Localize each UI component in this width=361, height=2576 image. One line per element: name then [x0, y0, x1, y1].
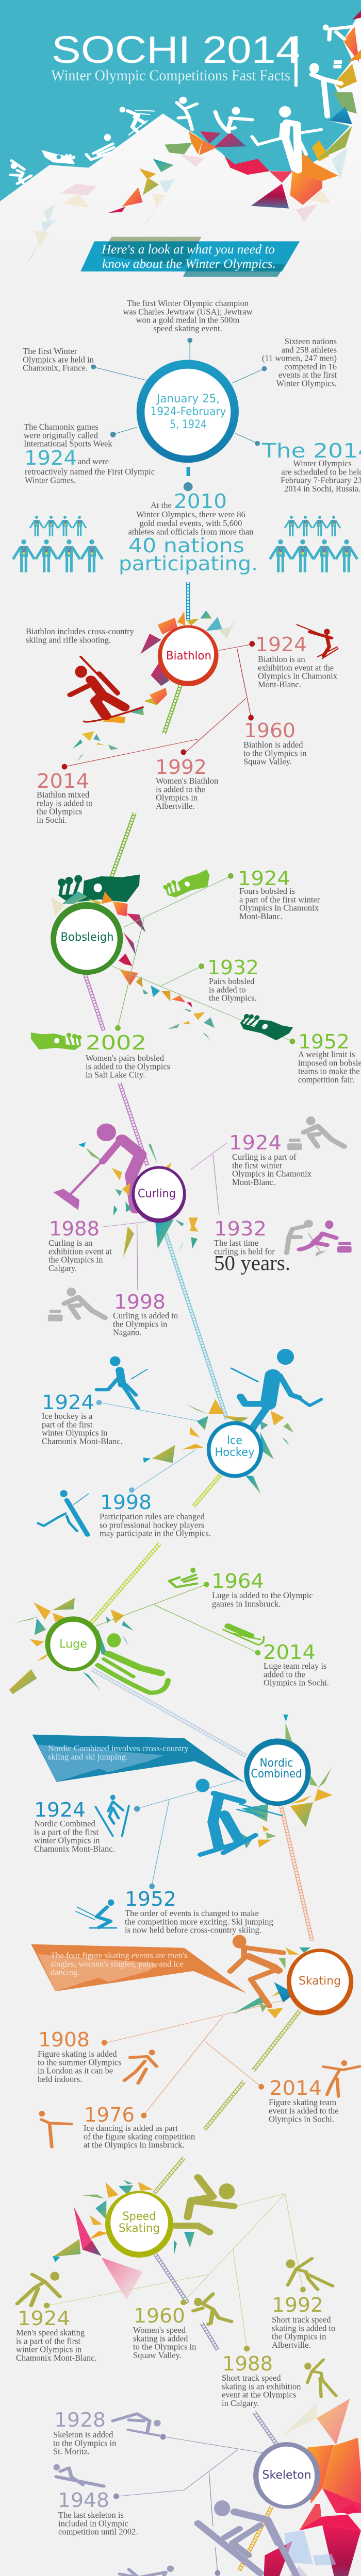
milestone 1924: 1924: [42, 1391, 94, 1414]
milestone 1932: 1932: [214, 1217, 267, 1240]
date badge: 5, 1924: [170, 418, 207, 431]
badge: bobsleigh: Bobsleigh: [61, 931, 113, 944]
milestone 1998: so professional hockey players: [100, 1520, 204, 1530]
milestone 1960: [243, 719, 306, 767]
icon: small hockey player top: [96, 1357, 147, 1408]
milestone 2014: [37, 770, 93, 825]
milestone 1924: is a part of the first: [16, 2336, 81, 2346]
icon: large skier: [195, 1778, 282, 1855]
icons: small nordic figures: [76, 1794, 129, 1928]
milestone 2002: is added to the Olympics: [86, 1061, 170, 1071]
fact: Chamonix games: Winter Games.: [25, 475, 76, 485]
milestone 1924: is a part of the first: [34, 1827, 99, 1837]
panel: curling: [48, 1116, 352, 1337]
connector lines: [113, 2434, 262, 2576]
milestone 2014: Olympics in Sochi.: [269, 2114, 334, 2124]
milestone 2014: 2014: [263, 1641, 316, 1664]
milestone 1960: Squaw Valley.: [243, 757, 292, 767]
milestone 1960: Squaw Valley.: [133, 2350, 182, 2360]
badge: speed skating: Skating: [119, 2222, 160, 2235]
milestone 1924: Olympics in Chamonix: [258, 671, 338, 681]
milestone 1924: Chamonix Mont-Blanc.: [16, 2353, 97, 2363]
icons: small curlers: [48, 1116, 352, 1321]
fact: Chamonix: Chamonix, France.: [23, 363, 88, 373]
intro text: skiing and rifle shooting.: [26, 635, 111, 645]
callout wedge: [31, 1944, 247, 1993]
milestone 1952: the competition more exciting. Ski jumping: [125, 1917, 273, 1926]
milestone 1948: competition until 2002.: [58, 2527, 138, 2537]
geometric star: [230, 2399, 361, 2576]
date badge: January 25,: [156, 393, 220, 405]
milestone 1924: Olympics in Chamonix: [232, 1169, 312, 1179]
fact: 2010 games: 2010: [174, 490, 227, 513]
geometric shards: [9, 1598, 134, 1694]
milestone 1924: [229, 1131, 312, 1187]
milestone 1960: Women's speed: [133, 2325, 186, 2335]
milestone 1976: of the figure skating competition: [84, 2131, 195, 2141]
fact: Chamonix games: International Sports Week: [24, 439, 112, 449]
date badge: 1924-February: [151, 405, 226, 418]
fact: the 2014 games: 2014 in Sochi, Russia.: [284, 484, 360, 494]
milestone 2014: Luge team relay is: [264, 1661, 326, 1671]
fact: Chamonix: The first Winter: [23, 346, 77, 356]
icon: large skeleton athlete: [198, 2500, 302, 2576]
panel: skeleton: [53, 2399, 361, 2576]
milestone 2014: event is added to the: [269, 2106, 339, 2115]
milestone 1964: 1964: [211, 1570, 264, 1592]
fact: sixteen nations: Winter Olympics.: [276, 378, 337, 388]
badge: speed skating: [105, 2191, 173, 2258]
milestone 2014: 2014: [269, 2077, 322, 2099]
fact: the 2014 games: are scheduled to be held: [281, 467, 361, 477]
milestone 1998: may participate in the Olympics.: [100, 1529, 211, 1538]
icon: medal athletes right: [270, 516, 357, 572]
icon: large luger: [98, 1633, 168, 1693]
milestone 1960: 1960: [134, 2304, 185, 2327]
connector lines: [96, 1400, 198, 1493]
fact: sixteen nations: Sixteen nations: [285, 336, 337, 346]
badge: skeleton: [253, 2442, 320, 2509]
milestone 2002: Women's pairs bobsled: [86, 1053, 165, 1063]
fact: 2010 games: athletes and officials from more than: [128, 527, 254, 537]
milestone 2014: Figure skating team: [269, 2097, 336, 2107]
milestone 1998: [100, 1491, 211, 1538]
white athlete silhouettes: [10, 25, 352, 183]
milestone 1960: skating is added: [133, 2333, 188, 2343]
connector lines: [112, 873, 295, 1044]
connector lines: [102, 2001, 282, 2119]
fact: 2010 games: participating.: [119, 552, 258, 575]
milestone 1960: 1960: [244, 719, 296, 742]
badge: skating: Skating: [299, 1975, 341, 1988]
icon: large bobsled: [58, 874, 140, 903]
milestone 1928: [53, 2409, 116, 2456]
milestone 1924: Fours bobsled is: [239, 886, 295, 896]
milestone 1988: skating is an exhibition: [222, 2381, 301, 2391]
panel: bobsleigh: [31, 867, 361, 1084]
milestone 1992: is added to the: [156, 784, 205, 794]
milestone 1928: to the Olympics in: [53, 2438, 116, 2448]
icon: large hockey player: [232, 1349, 321, 1430]
milestone 1992: Short track speed: [272, 2315, 331, 2325]
milestone 1932: the Olympics.: [209, 993, 257, 1003]
milestone 1932: Pairs bobsled: [209, 976, 255, 986]
milestone 2014: Olympics in Sochi.: [264, 1678, 329, 1688]
fact: Chamonix games: and were: [78, 456, 109, 466]
milestone 1928: St. Moritz.: [53, 2447, 90, 2456]
milestone 2002: in Salt Lake City.: [86, 1070, 145, 1080]
milestone 1924: Olympics in Chamonix: [239, 903, 319, 913]
badge: ice hockey: Hockey: [215, 1446, 255, 1459]
badge: skating: [287, 1948, 353, 2015]
milestone 1924: Curling is a part of: [232, 1152, 297, 1162]
milestone 2014: 2014: [37, 770, 89, 792]
fact: Chamonix games: [24, 422, 155, 485]
milestone 1948: 1948: [58, 2489, 109, 2512]
badge: luge: [45, 1616, 101, 1671]
milestone 1924: Ice hockey is a: [42, 1411, 93, 1421]
milestone 1988: [48, 1217, 112, 1273]
icons: small bobsleds: [31, 869, 293, 1050]
milestone 1924: Chamonix Mont-Blanc.: [42, 1436, 123, 1446]
shard over skater: [274, 1982, 294, 2003]
badge: nordic combined: Nordic: [260, 1757, 293, 1770]
milestone 1988: 1988: [49, 1217, 100, 1240]
geometric shards: [143, 1399, 293, 1494]
milestone 1976: [84, 2104, 195, 2150]
milestone 1924: Biathlon is an: [258, 654, 305, 664]
milestone 1932: [207, 956, 259, 1003]
milestone 1908: Figure skating is added: [38, 2049, 117, 2059]
milestone 1988: in Calgary.: [222, 2398, 259, 2408]
milestone 1960: to the Olympics in: [243, 748, 306, 758]
milestone 2014: [269, 2077, 339, 2124]
milestone 1924: [238, 867, 320, 921]
date badge: [137, 360, 239, 463]
callout wedge: Nordic Combined involves cross-country: [48, 1743, 189, 1753]
milestone 1924: Mont-Blanc.: [232, 1177, 275, 1187]
connector lines: [44, 2194, 306, 2351]
callout wedge: skiing and ski jumping.: [48, 1752, 128, 1761]
fact: the 2014 games: The 2014: [261, 439, 361, 462]
title: SOCHI 2014: [52, 28, 300, 71]
milestone 1908: to the summer Olympics: [38, 2057, 122, 2067]
panel: first winter games overview: [13, 298, 361, 575]
milestone 1992: Women's Biathlon: [156, 776, 218, 786]
milestone 1924: Nordic Combined: [34, 1819, 95, 1828]
callout wedge: The four figure skating events are men's: [51, 1951, 187, 1960]
panel: biathlon: [26, 611, 338, 825]
connector lines: [134, 1780, 239, 1889]
milestone 1998: the Olympics in: [113, 1319, 167, 1329]
milestone 1924: 1924: [229, 1131, 282, 1154]
callout wedge: [32, 1735, 245, 1783]
fact: 2010 games: Winter Olympics, there were 86: [136, 510, 245, 519]
badge: biathlon: [158, 625, 219, 686]
callout wedge: singles, women's singles, pairs, and ice: [51, 1959, 184, 1969]
milestone 1998: 1998: [114, 1291, 166, 1313]
milestone 1992: [155, 756, 218, 811]
badge: ice hockey: Ice: [227, 1434, 242, 1447]
fact: Chamonix games: retroactively named the First Olympic: [25, 467, 155, 477]
fact: 2010 games: At the: [151, 500, 172, 510]
milestone 1924: part of the first: [42, 1419, 93, 1429]
milestone 1924: a part of the first winter: [239, 894, 320, 904]
milestone 1952: is now held before cross-country skiing.: [125, 1925, 261, 1935]
icons: small speed skaters: [17, 2259, 336, 2397]
milestone 1908: [38, 2028, 122, 2084]
geometric shards: [78, 1142, 199, 1258]
badge: luge: Luge: [59, 1638, 87, 1651]
milestone 2014: relay is added to: [37, 798, 93, 808]
milestone 1924: Mont-Blanc.: [258, 680, 301, 689]
milestone 1932: 1932: [207, 956, 259, 979]
milestone 1952: A weight limit is: [298, 1049, 355, 1059]
milestone 2014: [263, 1641, 329, 1688]
milestone 2014: in Sochi.: [37, 815, 67, 825]
panel: luge: [9, 1568, 329, 1694]
milestone 1988: [222, 2352, 301, 2408]
milestone 2014: the Olympics: [37, 807, 82, 817]
milestone 1976: Ice dancing is added as part: [84, 2123, 178, 2133]
milestone 1908: held indoors.: [38, 2074, 82, 2084]
milestone 1924: Men's speed skating: [16, 2328, 85, 2337]
milestone 1992: 1992: [155, 756, 207, 778]
geometric ribbons: [25, 11, 361, 264]
milestone 1924: Mont-Blanc.: [239, 911, 283, 921]
milestone 1992: Albertville.: [272, 2340, 311, 2350]
badge: curling: [132, 1166, 186, 1223]
badge: speed skating: Speed: [123, 2210, 156, 2223]
milestone 1998: 1998: [100, 1491, 152, 1514]
milestone 2002: [86, 1031, 170, 1080]
geometric shards: [239, 1715, 333, 1849]
icon: small hockey player bottom: [38, 1490, 89, 1535]
badge: nordic combined: [244, 1738, 311, 1806]
fact: first champion: speed skating event.: [153, 324, 222, 333]
fact: sixteen nations: events at the first: [278, 370, 337, 380]
milestone 1998: Curling is added to: [113, 1311, 178, 1320]
icon: large speed skater: [175, 2177, 235, 2232]
milestone 1998: [113, 1291, 178, 1337]
milestone 1952: The order of events is changed to make: [125, 1908, 259, 1918]
milestone 1988: Curling is an: [48, 1238, 92, 1248]
milestone 1924: [255, 633, 338, 689]
milestone 1988: the Olympics in: [48, 1255, 103, 1265]
milestone 1932: curling is held for: [214, 1246, 275, 1256]
milestone 1952: teams to make the: [298, 1066, 360, 1076]
connector lines: [62, 641, 255, 770]
milestone 1948: included in Olympic: [58, 2518, 128, 2528]
milestone 1964: games in Innsbruck.: [212, 1599, 281, 1608]
milestone 1964: [211, 1570, 313, 1608]
milestone 2014: added to the: [264, 1669, 305, 1679]
connector lines: [95, 1582, 260, 1655]
milestone 1992: the Olympics in: [272, 2332, 326, 2342]
milestone 1960: to the Olympics in: [133, 2342, 196, 2352]
milestone 1988: 1988: [222, 2352, 273, 2375]
intro text: Biathlon includes cross-country: [26, 626, 135, 636]
milestone 1960: Biathlon is added: [243, 740, 303, 750]
fact: Chamonix games: The Chamonix games: [24, 422, 99, 432]
badge: bobsleigh: [51, 902, 123, 975]
fact: the 2014 games: Winter Olympics: [293, 459, 352, 468]
fact: first champion: was Charles Jewtraw (USA); Jewtraw: [123, 307, 253, 316]
fact: sixteen nations: (11 women, 247 men): [262, 353, 337, 363]
geometric shards: [53, 2180, 194, 2300]
milestone 1952: [125, 1888, 273, 1935]
teal sky: [0, 0, 361, 201]
banner: know about the Winter Olympics.: [102, 257, 276, 271]
milestone 1992: skating is added to: [272, 2323, 335, 2333]
fact: Chamonix: Olympics are held in: [23, 354, 94, 364]
geometric shards: [51, 891, 215, 1041]
banner: [80, 237, 300, 277]
milestone 2014: Biathlon mixed: [37, 790, 90, 800]
mountain background: [0, 0, 361, 278]
fact: first champion: won a gold medal in the 500m: [136, 315, 240, 325]
milestone 1932: 50 years.: [214, 1251, 290, 1275]
milestone 1924: winter Olympics in: [42, 1428, 107, 1438]
milestone 1924: Chamonix Mont-Blanc.: [34, 1844, 115, 1854]
milestone 1948: The last skeleton is: [58, 2510, 124, 2520]
fact: 2010 games: gold medal events, with 5,600: [140, 518, 242, 528]
fact: sixteen nations: and 258 athletes: [282, 345, 337, 354]
icon: large skater: [230, 1935, 283, 2006]
milestone 1992: Olympics in: [156, 793, 198, 803]
milestone 1924: winter Olympics in: [34, 1836, 100, 1845]
milestone 1952: 1952: [298, 1030, 350, 1053]
milestone 2002: 2002: [86, 1031, 146, 1054]
milestone 1924: winter Olympics in: [16, 2345, 81, 2354]
milestone 1992: 1992: [272, 2294, 323, 2316]
milestone 1988: exhibition event at: [48, 1246, 112, 1256]
title tail: [294, 36, 298, 87]
badge: curling: Curling: [138, 1188, 176, 1200]
milestone 1932: is added to: [209, 985, 245, 994]
milestone 1992: Albertville.: [156, 801, 195, 811]
badge: biathlon: Biathlon: [166, 650, 211, 663]
milestone 1998: Participation rules are changed: [100, 1512, 205, 1521]
callout wedge: dancing.: [51, 1968, 79, 1977]
milestone 1964: Luge is added to the Olympic: [212, 1590, 313, 1600]
milestone 1928: 1928: [54, 2409, 106, 2431]
fact: sixteen nations: competed in 16: [284, 362, 337, 371]
milestone 1908: 1908: [38, 2028, 90, 2051]
milestone 1988: Calgary.: [48, 1263, 77, 1273]
fact: 2010 games: 40 nations: [128, 534, 244, 557]
fact: Chamonix games: 1924: [24, 447, 77, 469]
panel: header: [0, 0, 361, 278]
milestone 1932: The last time: [214, 1238, 258, 1248]
fact: 2010 games: [119, 490, 258, 575]
milestone 1960: [133, 2304, 196, 2360]
milestone 1952: [298, 1030, 361, 1084]
milestone 1924: 1924: [34, 1799, 86, 1821]
milestone 1924: exhibition event at the: [258, 663, 334, 672]
geometric shards: [233, 1947, 311, 2019]
badge: ice hockey: [207, 1421, 263, 1478]
milestone 1952: 1952: [125, 1888, 176, 1910]
milestone 1952: competition fair.: [298, 1075, 354, 1084]
icon: medal athletes left: [13, 516, 103, 572]
icons: small luge sleds: [169, 1568, 264, 1645]
ladder timeline connecting the sports: [85, 582, 312, 2576]
milestone 1908: in London as it can be: [38, 2066, 113, 2076]
subtitle: Winter Olympic Competitions Fast Facts: [51, 67, 290, 84]
milestone 1932: [214, 1217, 290, 1275]
icon: large curler: [54, 1124, 140, 1210]
icons: small skaters: [39, 2049, 360, 2147]
milestone 1928: Skeleton is added: [53, 2430, 113, 2439]
milestone 1924: [16, 2307, 97, 2363]
milestone 1948: [58, 2489, 138, 2537]
milestone 1976: at the Olympics in Innsbruck.: [84, 2140, 185, 2150]
badge: nordic combined: Combined: [251, 1768, 302, 1781]
panel: nordic combined: [32, 1715, 333, 1935]
milestone 1988: event at the Olympics: [222, 2390, 296, 2400]
banner: Here's a look at what you need to: [101, 243, 275, 257]
milestone 1988: Short track speed: [222, 2373, 281, 2383]
badge: skeleton: Skeleton: [262, 2469, 311, 2482]
milestone 1924: 1924: [238, 867, 290, 890]
milestone 1992: [272, 2294, 335, 2350]
geometric shards: [73, 611, 236, 761]
milestone 1924: the first winter: [232, 1160, 283, 1170]
milestone 1924: [34, 1799, 115, 1854]
milestone 1998: Nagano.: [113, 1328, 141, 1337]
milestone 1924: [42, 1391, 123, 1446]
panel: skating: [31, 1935, 360, 2150]
milestone 1924: 1924: [255, 633, 307, 656]
icon: biathlete: [70, 625, 338, 722]
connector lines and dots: [91, 338, 267, 491]
milestone 1924: 1924: [18, 2307, 70, 2330]
fact: the 2014 games: [261, 439, 361, 494]
icons: small skeleton athletes: [54, 2414, 176, 2576]
fact: Chamonix games: were originally called: [24, 430, 99, 440]
connector lines: [102, 1143, 227, 1290]
milestone 1976: 1976: [84, 2104, 135, 2126]
panel: speed skating: [16, 2177, 336, 2408]
fact: first champion: The first Winter Olympic champion: [127, 298, 249, 308]
panel: ice hockey: [38, 1349, 321, 1538]
